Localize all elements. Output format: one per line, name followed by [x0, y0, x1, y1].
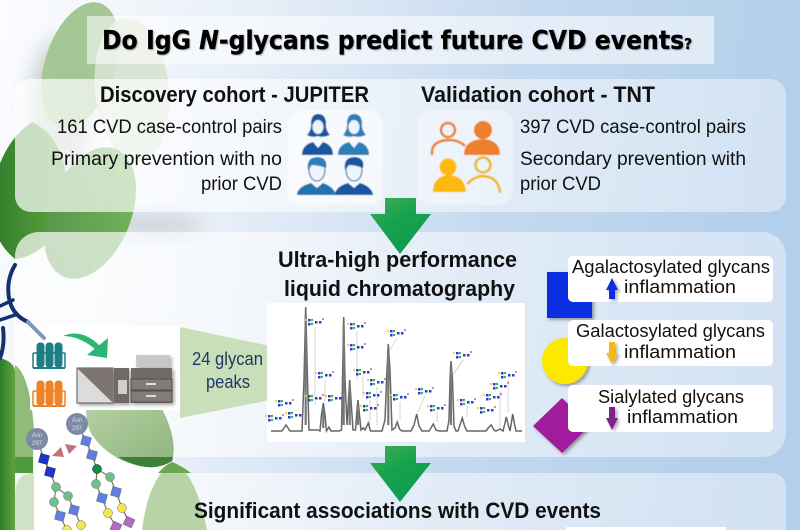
- title: [87, 16, 714, 64]
- icon: teal test tubes: [33, 343, 65, 368]
- arrow: sample to instrument: [63, 334, 108, 358]
- title: Do IgG N-glycans predict future CVD events?: [102, 26, 692, 56]
- icon: yellow circle: [542, 338, 588, 384]
- panel: lower glycan backdrop: [34, 473, 146, 530]
- text: validation details: [520, 117, 746, 195]
- leaf: left strip in lower panel: [15, 473, 34, 530]
- leaf: central blob shaded edge: [118, 457, 173, 467]
- arrow: cohorts to chromatography: [370, 198, 431, 254]
- heading: UHPLC: Ultra-high performance: [278, 247, 517, 272]
- heading: significant associations: Significant associations with CVD events: [194, 498, 601, 523]
- Asn297 circles: Asn: [32, 433, 42, 439]
- glycan annotations: [265, 318, 517, 422]
- leaf: right blob tip in gap: [158, 462, 191, 473]
- text: discovery details: 161 CVD case-control pairs: [57, 117, 282, 138]
- leaf: right lower blob: [142, 462, 207, 530]
- text: discovery details: [51, 117, 282, 195]
- callout: galactosylated glycans: inflammation: [624, 342, 736, 362]
- icon: orange test tubes: [33, 381, 65, 406]
- callout: galactosylated glycans: Galactosylated glycans: [576, 321, 765, 341]
- leaves: background foliage: [0, 0, 205, 530]
- arrow: chromatography to associations: [370, 446, 431, 502]
- icon: blue square: [547, 272, 592, 318]
- text: discovery details: Primary prevention with no: [51, 149, 282, 170]
- callout: agalactosylated glycans: [568, 256, 773, 302]
- icon: UHPLC instrument: [77, 355, 172, 403]
- callout: 24 glycan peaks: [180, 327, 270, 418]
- callout: 24 glycan peaks: peaks: [206, 372, 250, 392]
- callout: sialylated glycans: Sialylated glycans: [598, 387, 744, 407]
- leaf: central lower blob: [86, 409, 174, 467]
- panel: workflow sample box: [30, 326, 180, 410]
- text: validation details: prior CVD: [520, 174, 601, 195]
- heading: UHPLC: liquid chromatography: [284, 276, 516, 301]
- text: validation details: 397 CVD case-control pairs: [520, 117, 746, 138]
- callout: agalactosylated glycans: Agalactosylated glycans: [572, 257, 770, 277]
- callout: agalactosylated glycans: inflammation: [624, 277, 736, 297]
- icon: antibody outline: [0, 265, 44, 358]
- icon: blue people: [287, 110, 383, 205]
- text: validation details: Secondary prevention with: [520, 149, 746, 170]
- Asn297 circles: Asn: [72, 418, 82, 424]
- Asn297 circles: 297: [32, 441, 43, 447]
- Asn297 circles: 297: [72, 426, 83, 432]
- leaf: left strip in gap: [15, 457, 33, 473]
- panel: chromatography: [15, 232, 786, 457]
- panel: cohorts: [15, 79, 786, 212]
- chart: chromatogram: [265, 303, 525, 442]
- callout: sialylated glycans: [568, 385, 773, 432]
- heading: discovery cohort: Discovery cohort - JUPITER: [100, 82, 369, 107]
- heading: UHPLC: [278, 247, 517, 301]
- icon: orange and yellow people: [417, 110, 513, 205]
- icon: glycan chains: [26, 413, 135, 530]
- callout: 24 glycan peaks: 24 glycan: [192, 349, 263, 369]
- panel: glycan backdrop: [34, 410, 165, 530]
- heading: validation cohort: Validation cohort - TNT: [421, 82, 656, 107]
- callout: sialylated glycans: inflammation: [627, 407, 738, 427]
- icon: purple diamond: [533, 398, 590, 453]
- callout: cropped results box: [566, 527, 726, 530]
- leaf: left strip inside panel: [15, 365, 34, 457]
- panel: associations: [15, 473, 786, 530]
- text: discovery details: prior CVD: [201, 174, 282, 195]
- Asn297 circles: [26, 413, 88, 450]
- callout: galactosylated glycans: [568, 320, 773, 366]
